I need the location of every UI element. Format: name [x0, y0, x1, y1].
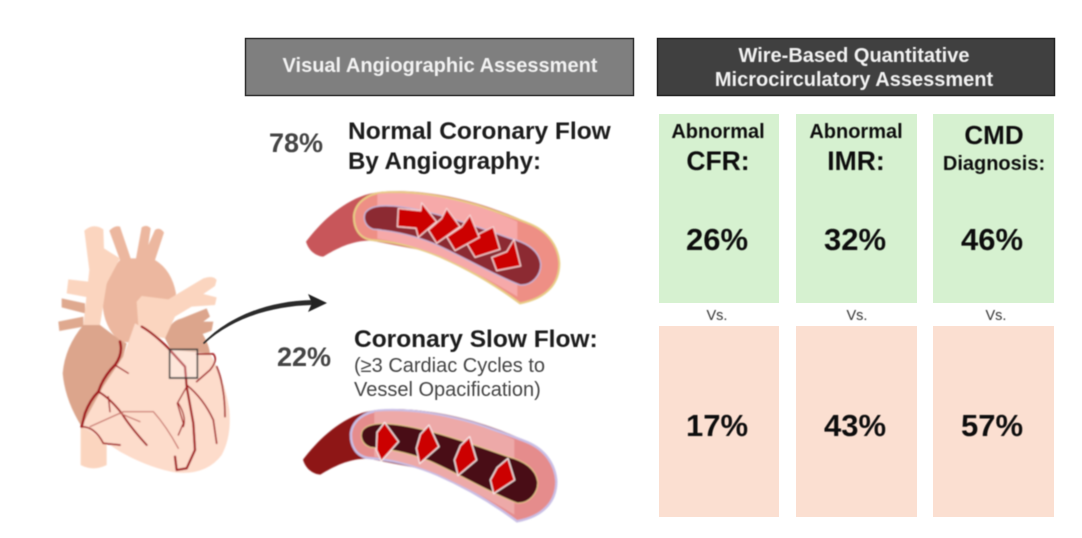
panel: abnormal CFR, normal flow: 26%: [686, 222, 748, 257]
adventitia outline: [351, 410, 556, 521]
icon: heart with coronary arteries: [58, 226, 230, 473]
aorta: [103, 226, 176, 343]
arrow: heart to vessels: [203, 294, 327, 344]
panel: IMR, slow flow: [796, 326, 917, 517]
header: wire-based quantitative microcirculatory assessment: [658, 38, 1054, 96]
flow arrows: [376, 422, 515, 494]
panel: abnormal CFR, normal flow: [659, 114, 779, 303]
header: visual angiographic assessment: [246, 38, 634, 96]
panel: abnormal CFR, normal flow: CFR:: [686, 146, 750, 176]
panel: CMD diagnosis, normal flow: [933, 114, 1054, 303]
stat: 22 percent: 22%: [277, 342, 331, 372]
outer vessel: [303, 409, 529, 481]
outer vessel: [306, 191, 532, 263]
pulmonary artery: [137, 277, 217, 338]
adventitia outline: [354, 192, 559, 303]
vs labels: Vs.: [707, 308, 727, 324]
heading: coronary slow flow: Vessel Opacification): [354, 379, 541, 401]
panel: CFR, slow flow: 17%: [686, 408, 748, 443]
header: wire-based quantitative microcirculatory assessment: Wire-Based Quantitative: [738, 45, 970, 67]
inferior vena cava: [81, 423, 107, 468]
heading: coronary slow flow: Coronary Slow Flow:: [354, 326, 598, 353]
panel: IMR, slow flow: 43%: [824, 408, 886, 443]
header: wire-based quantitative microcirculatory assessment: Microcirculatory Assessment: [715, 69, 993, 91]
left atrium: [165, 308, 213, 355]
vs labels: [707, 308, 1006, 324]
heading: coronary slow flow: (≥3 Cardiac Cycles to: [354, 355, 545, 377]
panel: abnormal IMR, normal flow: [796, 114, 917, 303]
vs labels: Vs.: [986, 308, 1006, 324]
lumen: [361, 424, 538, 503]
heading: coronary slow flow: [354, 326, 598, 401]
panel: abnormal CFR, normal flow: Abnormal: [671, 121, 765, 143]
lumen: [364, 206, 541, 285]
ventricles: [82, 323, 230, 473]
heading: normal coronary flow: [348, 118, 612, 175]
right atrium: [63, 325, 127, 427]
panel: abnormal IMR, normal flow: Abnormal: [809, 121, 903, 143]
left pulmonary veins: [58, 298, 85, 331]
panel: abnormal IMR, normal flow: IMR:: [827, 146, 885, 176]
superior vena cava: [83, 226, 120, 325]
coronary arteries: [82, 327, 225, 470]
panel: abnormal IMR, normal flow: 32%: [824, 222, 886, 257]
stat: 78 percent: 78%: [269, 128, 323, 158]
panel: CFR, slow flow: [659, 326, 779, 517]
vs labels: Vs.: [847, 308, 867, 324]
flow arrows: [397, 203, 521, 271]
panel: CMD diagnosis, normal flow: 46%: [961, 222, 1023, 257]
vessel: coronary slow flow: [303, 409, 556, 521]
panel: CMD diagnosis, normal flow: Diagnosis:: [943, 153, 1045, 175]
media layer: [377, 193, 517, 297]
magnifier square: [170, 349, 197, 378]
heading: normal coronary flow: By Angiography:: [348, 148, 541, 175]
panel: CMD, slow flow: 57%: [961, 408, 1023, 443]
heading: normal coronary flow: Normal Coronary Flow: [348, 118, 612, 145]
vessel: normal coronary flow: [306, 191, 559, 303]
media layer: [374, 411, 514, 515]
panel: CMD diagnosis, normal flow: CMD: [964, 120, 1024, 150]
panel: CMD, slow flow: [933, 326, 1054, 517]
header: visual angiographic assessment: Visual Angiographic Assessment: [283, 55, 598, 77]
